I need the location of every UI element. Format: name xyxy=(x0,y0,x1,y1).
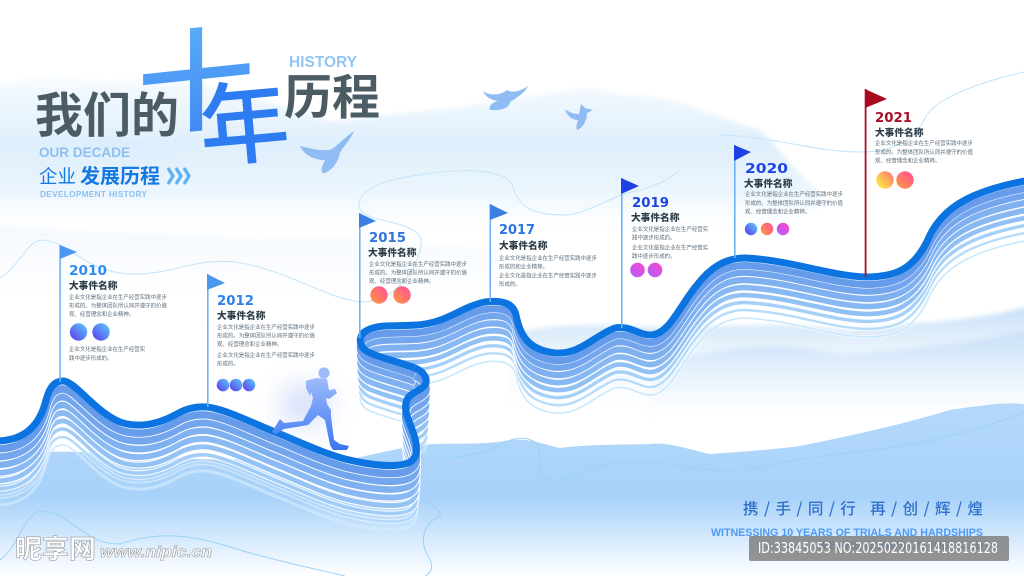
description: 企业文化是指企业在生产经营实践中逐步 xyxy=(875,139,973,147)
flag xyxy=(734,145,751,258)
description xyxy=(369,260,467,285)
description xyxy=(499,272,597,288)
thin flowing lines, lower xyxy=(0,412,1024,576)
event name: 大事件名称 xyxy=(217,308,266,322)
year: 2017 xyxy=(499,223,535,238)
flag xyxy=(621,178,639,328)
year: 2020 xyxy=(745,162,788,177)
background mountains: faint range xyxy=(0,225,500,320)
description: 形成的。为整体团队所认同并遵守的价值 xyxy=(217,332,315,340)
description: 企业文化是指企业在生产经营实践中逐步 xyxy=(369,260,467,268)
description: 形成的和企业精神。 xyxy=(499,262,548,270)
thin flowing lines xyxy=(0,72,1024,302)
description: 观、经营理念和企业精神。 xyxy=(69,310,134,318)
description: 观、经营理念和企业精神。 xyxy=(875,156,940,164)
description: 企业文化是指企业在生产经营实践中逐步 xyxy=(745,190,843,198)
milestone 2015 xyxy=(359,213,467,338)
ribbon: front band with layered stripes xyxy=(0,368,426,530)
circles xyxy=(217,379,255,391)
description xyxy=(875,139,973,164)
icon: middle dove xyxy=(483,86,528,110)
description xyxy=(632,225,709,242)
description xyxy=(69,293,167,318)
description xyxy=(499,254,597,270)
icon: small dove xyxy=(565,104,593,130)
milestone 2021 xyxy=(865,89,973,277)
ribbon: upper band with layered stripes xyxy=(361,180,1024,413)
flag xyxy=(865,89,887,277)
description xyxy=(69,345,146,362)
description: 企业文化是指企业在生产经营实践中逐步 xyxy=(217,351,315,359)
event name: 大事件名称 xyxy=(69,278,118,292)
watermark: site logo xyxy=(15,529,212,566)
event name: 大事件名称 xyxy=(875,125,924,139)
description: 企业文化是指企业在生产经营实践中逐步 xyxy=(69,293,167,301)
description: 企业文化是指企业在生产经营实践中逐步 xyxy=(499,254,597,262)
description xyxy=(745,190,843,216)
year: 2010 xyxy=(69,264,107,279)
year: 2021 xyxy=(875,111,912,126)
flag xyxy=(359,213,376,338)
milestone 2019 xyxy=(621,178,709,328)
watermark: site logo: 昵享网 xyxy=(15,529,96,566)
icon: runner silhouette xyxy=(272,367,349,450)
description: 践中逐步形成的。 xyxy=(69,354,113,362)
description: 观、经营理念和企业精神。 xyxy=(745,208,810,216)
flag xyxy=(207,274,225,407)
milestone 2012 xyxy=(207,274,315,407)
description: 企业文化是指企业在生产经营实 xyxy=(632,225,709,233)
icon: chevrons xyxy=(168,168,189,184)
title: 历程: 历程 xyxy=(284,58,380,128)
description: 形成的。为整体团队所认同并遵守的价值 xyxy=(875,148,973,156)
subtitle: 企业发展历程: 企业 xyxy=(39,163,76,189)
circles xyxy=(370,286,411,304)
description: 形成的。为整体团队所认同并遵守的价值 xyxy=(69,302,167,310)
description: 践中逐步形成的。 xyxy=(632,234,676,242)
event name: 大事件名称 xyxy=(631,210,680,224)
label: OUR DECADE: OUR DECADE xyxy=(39,144,130,160)
flag xyxy=(59,245,77,382)
year: 2019 xyxy=(632,196,669,211)
circles xyxy=(630,263,662,277)
description xyxy=(217,323,315,348)
description: 企业文化是指企业在生产经营实践中逐步 xyxy=(217,323,315,331)
background mountains: upper range xyxy=(0,76,830,245)
description: 观、经营理念和企业精神。 xyxy=(369,277,434,285)
background mountains: lower range xyxy=(0,403,1024,576)
description: 形成的。为整体团队所认同并遵守的价值 xyxy=(369,268,467,276)
event name: 大事件名称 xyxy=(368,245,417,259)
description: 企业文化是指企业在生产经营实 xyxy=(69,345,146,353)
subtitle: 企业发展历程 xyxy=(39,160,160,189)
description: 企业文化是指企业在生产经营实 xyxy=(632,244,709,252)
description xyxy=(217,351,315,368)
milestone 2017 xyxy=(490,204,597,302)
event name: 大事件名称 xyxy=(744,176,793,190)
label: HISTORY: HISTORY xyxy=(289,54,358,71)
description: 形成的。为整体团队所认同并遵守的价值 xyxy=(745,199,843,207)
circles xyxy=(745,223,789,235)
year: 2012 xyxy=(217,294,254,309)
flag xyxy=(490,204,508,302)
icon: large dove xyxy=(300,131,354,173)
description: 形成的。 xyxy=(217,360,239,368)
english slogan: WE ARE ALWAYS ON THE ROAD xyxy=(818,540,983,552)
label: DEVELOPMENT HISTORY: DEVELOPMENT HISTORY xyxy=(40,190,148,199)
english slogan xyxy=(711,527,983,552)
description: 企业文化是指企业在生产经营实践中逐步 xyxy=(499,272,597,280)
description: 形成的。 xyxy=(499,280,521,288)
background mountains: middle range xyxy=(500,305,1024,435)
watermark: id bar xyxy=(749,536,1009,561)
description xyxy=(632,244,709,260)
subtitle: 企业发展历程: 发展历程 xyxy=(80,160,160,189)
circles xyxy=(70,323,110,341)
ribbon: fold back band xyxy=(360,337,415,426)
year: 2015 xyxy=(369,231,406,246)
title: 我们的: 我们的 xyxy=(35,76,179,146)
milestone 2020 xyxy=(734,145,843,258)
description: 践中逐步形成的。 xyxy=(632,252,676,260)
event name: 大事件名称 xyxy=(499,238,548,252)
title xyxy=(35,0,380,199)
circles xyxy=(876,171,914,189)
title: brush 年: 年 xyxy=(193,49,294,186)
slogan: 携/手/同/行 再/创/辉/煌 xyxy=(743,497,983,519)
english slogan: WITNESSING 10 YEARS OF TRIALS AND HARDSHIPS xyxy=(711,527,983,539)
milestone 2010 xyxy=(59,245,167,382)
watermark: site logo: www.nipic.cn xyxy=(100,544,212,561)
description: 观、经营理念和企业精神。 xyxy=(217,340,282,348)
